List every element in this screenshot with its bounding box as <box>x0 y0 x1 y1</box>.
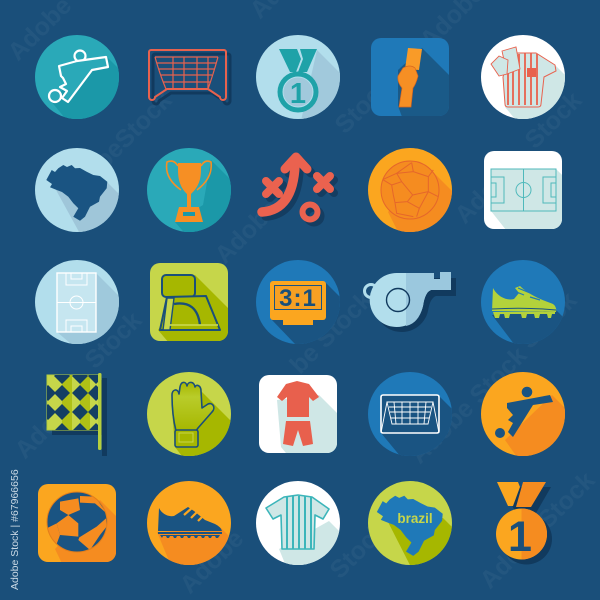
watermark text: Adobe <box>9 389 84 464</box>
icon: orange medal <box>496 482 552 564</box>
icon: referee shirt and cards <box>481 35 600 160</box>
icon: dark boot on orange <box>147 481 231 565</box>
watermark text: Adobe <box>174 524 249 599</box>
icon: trophy <box>147 148 231 232</box>
stock id side text: Adobe Stock | #67966656 <box>9 469 21 590</box>
icon: red card in hand <box>371 38 449 116</box>
watermark text: Stock <box>532 466 600 534</box>
icon: glove <box>147 372 231 456</box>
watermark text: Stock <box>324 516 392 584</box>
icon: soccer ball tile <box>38 484 140 580</box>
score text: 3:1 <box>279 285 317 312</box>
icon: red kit <box>259 375 337 453</box>
icon: corner seat <box>150 263 228 341</box>
watermark text: Adobe <box>54 134 129 209</box>
icon: white goal <box>368 372 452 456</box>
watermark text: Adobe <box>209 194 284 269</box>
icon: scoreboard <box>256 260 340 344</box>
watermark text: Stock <box>109 86 177 154</box>
watermark text: Stock <box>79 306 147 374</box>
icon: teal striped shirt <box>256 481 340 565</box>
icon: brazil lime with label: brazil <box>397 511 433 526</box>
watermark text: be Stock <box>284 286 378 379</box>
icon: teal medal <box>256 35 340 119</box>
icon: vertical pitch <box>35 260 140 360</box>
icon: dark player on orange <box>481 372 600 490</box>
watermark text: Stock <box>519 86 587 154</box>
watermark text: Adobe Stock <box>404 341 532 469</box>
icon: teal medal: 1 <box>290 78 306 110</box>
icon: horizontal pitch <box>484 151 600 260</box>
icon: orange medal: 1 <box>508 513 532 561</box>
icon: corner flag <box>46 373 107 456</box>
icon: brazil lime with label <box>368 481 452 565</box>
icon: orange ball <box>368 148 452 232</box>
icon: red goal <box>149 50 230 104</box>
watermark text: Stock <box>514 286 582 354</box>
watermark text: Stock <box>329 71 397 139</box>
watermark text: Adobe <box>449 154 524 229</box>
icon: player outline <box>35 35 119 119</box>
icon: whistle <box>364 272 456 332</box>
watermark text: Adobe <box>474 519 549 594</box>
icon: brazil map dark <box>35 148 150 270</box>
icon: lime boot <box>481 260 565 344</box>
icon: tactics board <box>262 157 334 224</box>
